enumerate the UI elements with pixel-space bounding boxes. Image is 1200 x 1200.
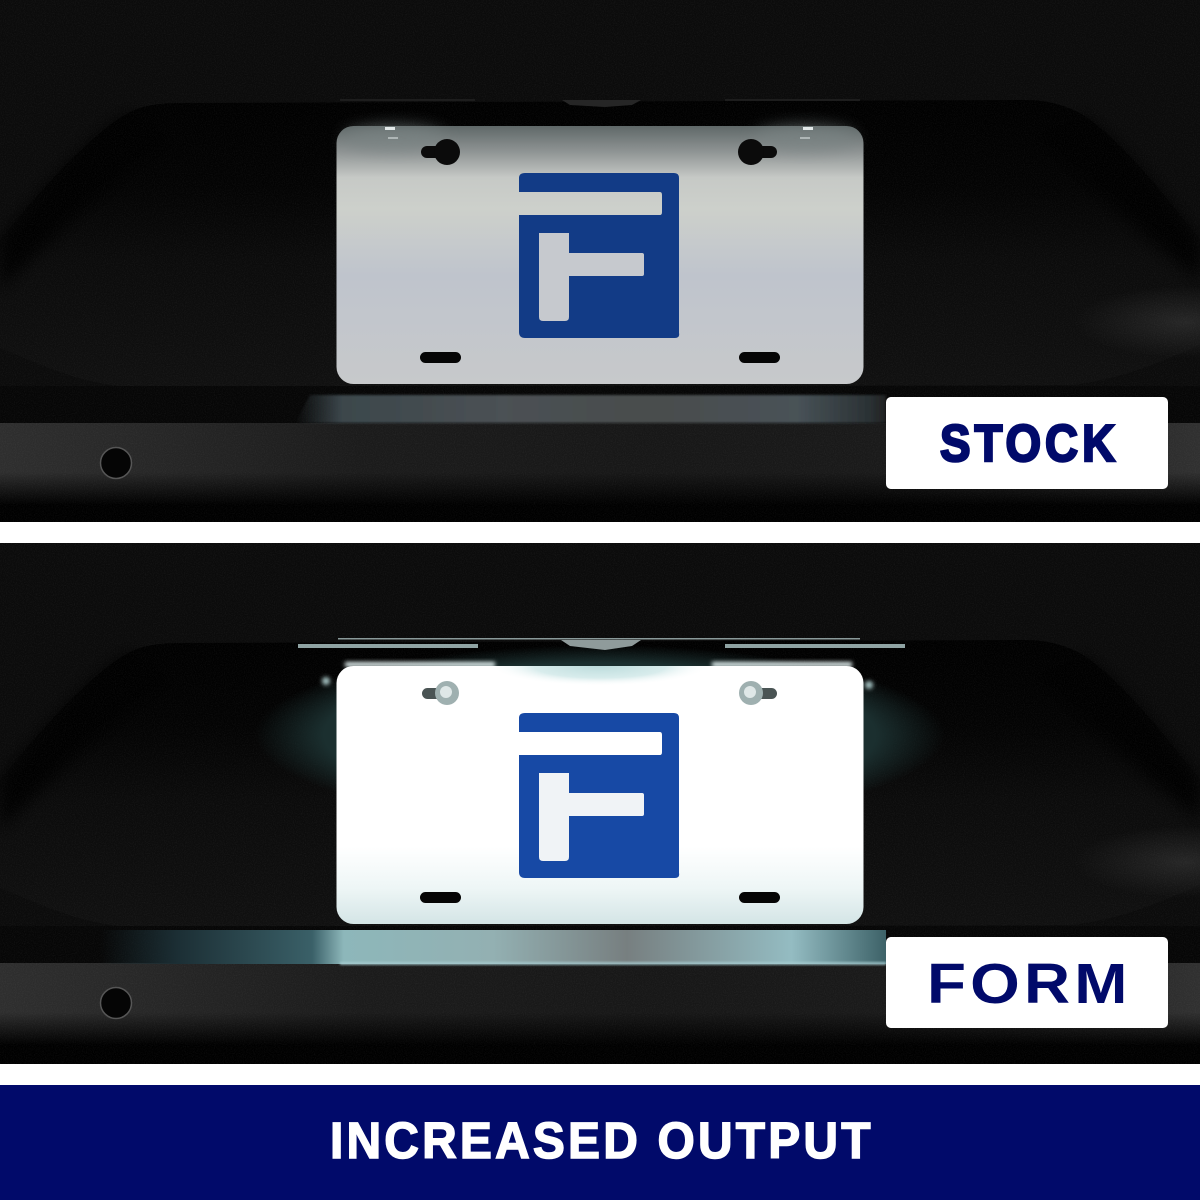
mounting bolts (422, 681, 777, 705)
vehicle bumper background (0, 0, 1200, 533)
plate logo (519, 173, 679, 338)
license plate, dimly lit (336, 126, 864, 384)
side LED reflections (322, 677, 873, 689)
mounting bolts (421, 139, 777, 165)
vehicle bumper background (0, 540, 1200, 1073)
upper light housing (298, 638, 905, 650)
upper light housing (340, 99, 860, 107)
license plate, brightly lit (336, 666, 864, 924)
plate mounting slots (420, 892, 780, 903)
lower trim sheen (100, 930, 886, 965)
panel: form lighting photo (0, 540, 1200, 1073)
plate mounting slots (420, 352, 780, 363)
plate logo (519, 713, 679, 878)
lower trim sheen (295, 395, 886, 423)
light glow around plate (268, 648, 932, 786)
label: form: FORM (927, 951, 1127, 1015)
banner: increased output (0, 1085, 1200, 1200)
panel: stock lighting photo (0, 0, 1200, 533)
label: stock (886, 397, 1168, 489)
label: stock: STOCK (940, 415, 1115, 473)
banner: increased output: INCREASED OUTPUT (330, 1113, 870, 1169)
label: form (886, 937, 1168, 1028)
